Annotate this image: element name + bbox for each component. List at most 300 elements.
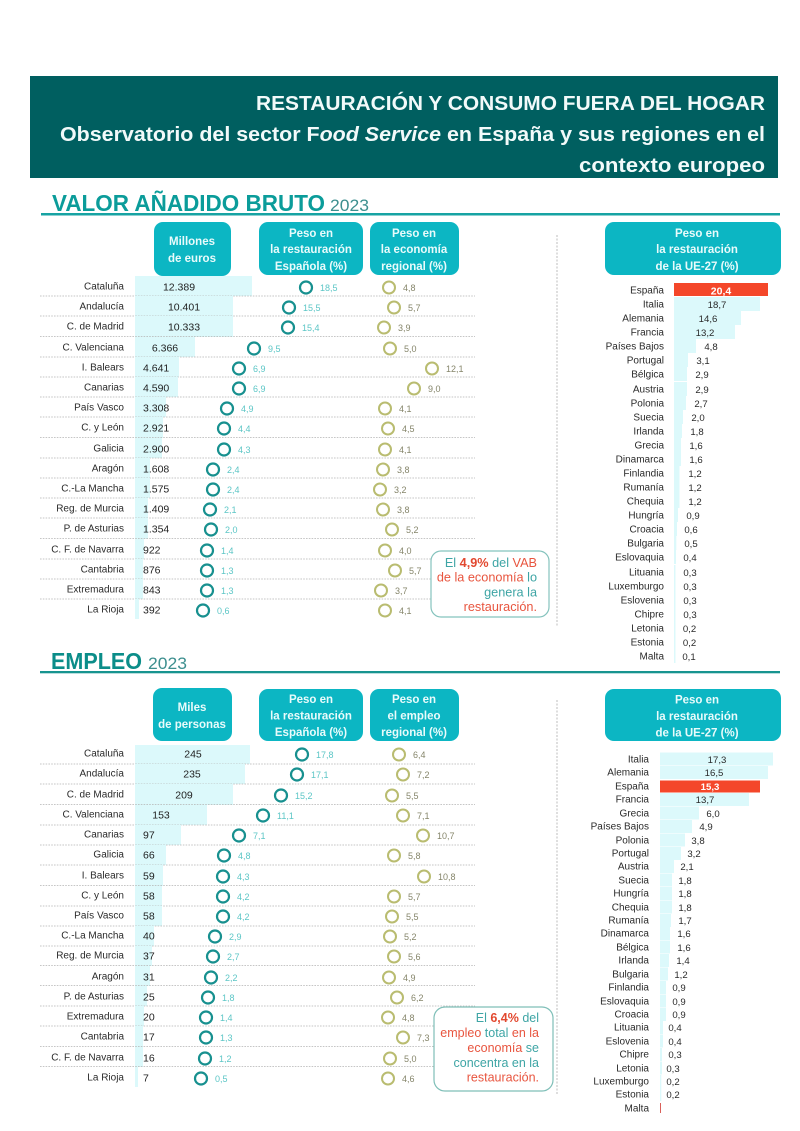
panel: VAB regiones — [40, 222, 475, 619]
bars: UE-27 VAB: 0,3 — [683, 582, 697, 593]
bars: UE-27 VAB: Croacia — [630, 524, 664, 536]
row: C.-La Mancha: 5,2 — [404, 932, 417, 942]
bars: UE-27 empleo: Eslovaquia — [600, 996, 649, 1008]
row: C. F. de Navarra — [40, 539, 475, 559]
row: C.-La Mancha: 2,4 — [227, 485, 240, 495]
header: peso en la restauración española: la restauración — [270, 710, 352, 722]
row: I. Balears: 12,1 — [446, 364, 464, 374]
bars: UE-27 empleo: Irlanda — [618, 956, 649, 966]
row: Galicia: 5,8 — [408, 851, 421, 861]
bars: UE-27 empleo: 15,3 — [701, 782, 719, 793]
row: I. Balears: 10,8 — [438, 872, 456, 882]
row: La Rioja: 392 — [143, 604, 161, 616]
bars: UE-27 VAB: Eslovenia — [621, 596, 664, 606]
row: C. Valenciana: C. Valenciana — [62, 342, 124, 354]
bars: UE-27 empleo: 1,8 — [678, 876, 692, 887]
row: C. y León: C. y León — [81, 422, 124, 434]
heading: empleo: EMPLEO — [51, 648, 142, 674]
row: C. F. de Navarra: 1,2 — [219, 1054, 232, 1064]
row: I. Balears: 4.641 — [143, 362, 169, 374]
row: P. de Asturias: 2,0 — [225, 525, 238, 535]
row: Galicia: 4,1 — [399, 445, 412, 455]
title banner: RESTAURACIÓN Y CONSUMO FUERA DEL HOGAR — [256, 91, 766, 115]
row: Canarias: 4.590 — [143, 382, 169, 394]
row: Andalucía: 15,5 — [303, 303, 321, 313]
bars: UE-27 VAB: Finlandia — [623, 468, 664, 480]
row: Reg. de Murcia — [40, 498, 475, 518]
header: peso en la restauración española: Peso en — [289, 228, 333, 240]
row: Extremadura: Extremadura — [67, 584, 124, 596]
row: C. F. de Navarra: 1,4 — [221, 546, 234, 556]
heading: empleo — [40, 648, 780, 674]
row: Cantabria: 5,7 — [409, 566, 422, 576]
row: C.-La Mancha: C.-La Mancha — [61, 484, 124, 494]
row: Reg. de Murcia: 37 — [143, 950, 155, 962]
row: C. y León — [40, 417, 475, 438]
callout: empleo 6,4%: restauración. — [467, 1070, 539, 1084]
callout: VAB 4,9%: de la economía lo — [437, 570, 537, 584]
bars: UE-27 empleo: 0,9 — [672, 997, 686, 1008]
bars: UE-27 empleo: 0,2 — [666, 1090, 680, 1101]
bars: UE-27 VAB: 0,4 — [683, 553, 697, 564]
row: Cantabria: 7,3 — [417, 1033, 430, 1043]
row: Cataluña — [40, 745, 475, 764]
bars: UE-27 empleo: Chequia — [612, 902, 649, 914]
bars: UE-27 VAB: 1,8 — [690, 427, 704, 438]
row: Galicia: 4,3 — [238, 445, 251, 455]
row: Galicia — [40, 845, 475, 865]
title banner: contexto europeo — [579, 155, 765, 177]
bars: UE-27 VAB: Luxemburgo — [608, 582, 664, 592]
row: País Vasco: 4,9 — [241, 404, 254, 414]
row: Aragón: Aragón — [92, 464, 124, 474]
header: peso en la restauración UE-27 — [605, 689, 781, 741]
row: Canarias: Canarias — [84, 382, 124, 394]
bars: UE-27 empleo: 1,2 — [674, 970, 688, 981]
row: I. Balears: I. Balears — [82, 870, 124, 882]
row: Andalucía: 235 — [183, 768, 201, 780]
bars: UE-27 empleo: Chipre — [620, 1050, 649, 1060]
bars: UE-27 VAB: Bélgica — [631, 370, 664, 380]
row: Andalucía: Andalucía — [80, 768, 124, 780]
header: peso en la restauración española: Española (%) — [275, 261, 347, 273]
row: Andalucía: Andalucía — [80, 302, 124, 312]
bars: UE-27 empleo: Finlandia — [608, 982, 649, 994]
row: C. F. de Navarra: 16 — [143, 1052, 155, 1064]
header: millones de euros: Millones — [169, 236, 215, 248]
row: C.-La Mancha: 2,9 — [229, 932, 242, 942]
callout: empleo 6,4%: concentra en la — [454, 1056, 539, 1070]
bars: UE-27 empleo: 0,9 — [672, 983, 686, 994]
row: C. Valenciana: 11,1 — [277, 811, 294, 821]
header: peso en la restauración UE-27: de la UE-27 (%) — [655, 261, 739, 273]
row: Galicia: Galicia — [93, 850, 124, 860]
bars: UE-27 VAB: 14,6 — [699, 314, 717, 325]
header: peso en la restauración UE-27 — [605, 222, 781, 275]
row: Andalucía: 5,7 — [408, 303, 421, 313]
row: Cataluña: Cataluña — [84, 748, 124, 760]
row: C. Valenciana: 5,0 — [404, 344, 417, 354]
row: Extremadura: 843 — [143, 584, 161, 596]
row: C. Valenciana — [40, 337, 475, 357]
row: La Rioja — [87, 599, 412, 619]
bars: UE-27 VAB: Lituania — [629, 568, 664, 578]
row: Cataluña: 18,5 — [320, 283, 338, 293]
header: peso en la restauración española — [259, 689, 363, 741]
row: C. y León: 4,4 — [238, 424, 251, 434]
bars: UE-27 VAB — [606, 283, 768, 663]
row: C. y León: C. y León — [81, 890, 124, 902]
bars: UE-27 empleo: Estonia — [616, 1090, 649, 1100]
row: Reg. de Murcia: 2,7 — [227, 952, 240, 962]
bars: UE-27 VAB: 1,6 — [689, 441, 703, 452]
row: Aragón: 31 — [143, 972, 155, 984]
bars: UE-27 VAB: Irlanda — [633, 426, 664, 438]
row: Aragón: 4,9 — [403, 973, 416, 983]
row: C. F. de Navarra: 4,0 — [399, 546, 412, 556]
row: C. Valenciana: 7,1 — [417, 811, 430, 821]
bars: UE-27 VAB: Países Bajos — [606, 342, 664, 352]
row: C. Valenciana: 6.366 — [152, 342, 178, 354]
bars: UE-27 VAB: 0,9 — [686, 511, 700, 522]
row: Cataluña: 245 — [184, 748, 202, 760]
row: I. Balears: 59 — [143, 870, 155, 882]
header: peso en la restauración UE-27: la restauración — [656, 244, 738, 256]
bars: UE-27 empleo: Italia — [628, 754, 649, 766]
row: Extremadura — [40, 579, 475, 599]
header: peso en la restauración UE-27: Peso en — [675, 694, 719, 706]
callout: VAB 4,9% — [431, 551, 549, 617]
row: P. de Asturias: P. de Asturias — [64, 524, 124, 534]
callout: empleo 6,4% — [434, 1007, 553, 1091]
bars: UE-27 empleo: 1,6 — [677, 929, 691, 940]
row: País Vasco — [40, 906, 475, 926]
row: Galicia: 4,8 — [238, 851, 251, 861]
bars: UE-27 empleo: Lituania — [614, 1022, 649, 1034]
bars: UE-27 empleo: Bélgica — [616, 942, 649, 954]
row: C. F. de Navarra: 5,0 — [404, 1054, 417, 1064]
divider: VAB vertical — [556, 235, 558, 626]
row: C.-La Mancha: 40 — [143, 930, 155, 942]
row: P. de Asturias — [40, 986, 475, 1006]
row: C. de Madrid: 5,5 — [406, 791, 419, 801]
row: Canarias: 97 — [143, 830, 155, 842]
row: Canarias: 9,0 — [428, 384, 441, 394]
row: Extremadura: Extremadura — [67, 1012, 124, 1022]
bars: UE-27 empleo: 0,2 — [666, 1077, 680, 1088]
bars: UE-27 VAB: 0,3 — [683, 610, 697, 621]
bars: UE-27 VAB: Malta — [640, 652, 664, 662]
bars: UE-27 VAB: 20,4 — [711, 286, 731, 298]
bars: UE-27 empleo: 16,5 — [705, 768, 723, 779]
row: País Vasco: 3.308 — [143, 402, 169, 414]
row: Andalucía: 7,2 — [417, 770, 430, 780]
row: Andalucía — [40, 764, 475, 784]
bars: UE-27 VAB: Polonia — [631, 398, 664, 410]
row: C. de Madrid: 10.333 — [168, 322, 200, 334]
row: Canarias: Canarias — [84, 830, 124, 840]
row: C. de Madrid: 15,2 — [295, 791, 313, 801]
bars: UE-27 VAB: 0,5 — [684, 539, 698, 550]
bars: UE-27 empleo: Polonia — [616, 836, 649, 846]
row: Galicia: 66 — [143, 850, 155, 862]
row: Cataluña: Cataluña — [84, 282, 124, 292]
panel: empleo regiones — [40, 688, 475, 1087]
row: P. de Asturias: 25 — [143, 992, 155, 1004]
bars: UE-27 VAB: 2,9 — [695, 385, 709, 396]
bars: UE-27 empleo: Luxemburgo — [593, 1076, 649, 1088]
bars: UE-27 VAB: Austria — [633, 384, 664, 396]
row: Cantabria: 876 — [143, 564, 161, 576]
divider: empleo vertical — [556, 700, 558, 1094]
bars: UE-27 VAB: Suecia — [633, 412, 664, 424]
row: Reg. de Murcia: 5,6 — [408, 952, 421, 962]
heading: valor añadido bruto — [41, 189, 780, 216]
bars: UE-27 empleo: Dinamarca — [601, 928, 649, 940]
row: País Vasco: 58 — [143, 910, 155, 922]
row: Aragón: 1.608 — [143, 464, 169, 476]
bars: UE-27 empleo: 17,3 — [708, 755, 726, 766]
panel: empleo UE-27 — [591, 689, 781, 1114]
bars: UE-27 empleo: Portugal — [612, 848, 649, 860]
row: Cantabria: 17 — [143, 1032, 155, 1044]
panel: VAB UE-27 — [605, 222, 781, 663]
bars: UE-27 VAB: Alemania — [622, 314, 664, 324]
row: Cataluña: 6,4 — [413, 750, 426, 760]
header: peso en la economía regional: Peso en — [392, 228, 436, 240]
bars: UE-27 empleo: 3,8 — [691, 836, 705, 847]
row: P. de Asturias: 6,2 — [411, 993, 424, 1003]
row: Canarias: 6,9 — [253, 384, 266, 394]
row: C.-La Mancha — [40, 926, 475, 946]
row: Andalucía: 10.401 — [168, 302, 200, 314]
callout: VAB 4,9%: genera la — [484, 586, 538, 600]
row: País Vasco: 5,5 — [406, 912, 419, 922]
row: I. Balears — [40, 357, 475, 377]
bars: UE-27 empleo: 4,9 — [699, 822, 713, 833]
bars: UE-27 empleo: 6,0 — [706, 809, 720, 820]
row: Aragón: Aragón — [92, 972, 124, 982]
row: Galicia: Galicia — [93, 444, 124, 454]
row: Cantabria: 1,3 — [220, 1033, 233, 1043]
header: peso en el empleo regional: Peso en — [392, 694, 436, 706]
row: Canarias — [40, 377, 475, 397]
bars: UE-27 empleo: 13,7 — [696, 795, 714, 806]
header: peso en la restauración española: Peso en — [289, 694, 333, 706]
row: C. Valenciana: 9,5 — [268, 344, 281, 354]
header: peso en la restauración UE-27: la restauración — [656, 711, 738, 723]
header: peso en la restauración española: la restauración — [270, 244, 352, 256]
row: Extremadura: 4,8 — [402, 1013, 415, 1023]
bars: UE-27 VAB: 3,1 — [696, 356, 710, 367]
bars: UE-27 empleo: 0,9 — [672, 1010, 686, 1021]
bars: UE-27 empleo: 2,1 — [680, 862, 694, 873]
row: Extremadura: 3,7 — [395, 586, 408, 596]
row: C. F. de Navarra: C. F. de Navarra — [51, 1052, 124, 1064]
row: C. de Madrid: 15,4 — [302, 323, 320, 333]
bars: UE-27 VAB: Dinamarca — [616, 454, 664, 466]
row: La Rioja — [87, 1067, 415, 1087]
row: Andalucía: 17,1 — [311, 770, 329, 780]
row: País Vasco: País Vasco — [74, 402, 124, 414]
row: C. de Madrid: C. de Madrid — [67, 322, 124, 332]
title banner — [30, 76, 778, 178]
bars: UE-27 empleo: Francia — [616, 794, 649, 806]
row: C. Valenciana — [40, 805, 475, 825]
row: Aragón: 2,4 — [227, 465, 240, 475]
bars: UE-27 empleo: 0,4 — [668, 1023, 682, 1034]
row: P. de Asturias — [40, 518, 475, 539]
row: Aragón — [40, 966, 475, 986]
bars: UE-27 VAB: Italia — [643, 300, 664, 310]
row: Galicia: 2.900 — [143, 444, 169, 456]
bars: UE-27 VAB: 1,2 — [688, 483, 702, 494]
bars: UE-27 VAB: 2,7 — [694, 399, 708, 410]
bars: UE-27 VAB: Hungría — [628, 510, 664, 522]
row: C. de Madrid: 3,9 — [398, 323, 411, 333]
bars: UE-27 empleo: 1,8 — [678, 889, 692, 900]
row: Andalucía — [40, 296, 475, 316]
row: La Rioja: La Rioja — [87, 604, 124, 616]
bars: UE-27 empleo: Grecia — [620, 808, 649, 820]
bars: UE-27 empleo: Hungría — [613, 888, 649, 900]
bars: UE-27 VAB: 0,1 — [682, 652, 696, 663]
row: C.-La Mancha: 3,2 — [394, 485, 407, 495]
row: Reg. de Murcia: Reg. de Murcia — [56, 504, 124, 514]
bars: UE-27 empleo: Croacia — [615, 1010, 649, 1020]
bars: UE-27 empleo: Malta — [625, 1104, 649, 1114]
row: Cantabria: Cantabria — [81, 1032, 124, 1042]
bars: UE-27 empleo: 1,6 — [677, 943, 691, 954]
row: Aragón: 3,8 — [397, 465, 410, 475]
bars: UE-27 VAB: Chequia — [627, 496, 664, 508]
callout: empleo 6,4%: empleo total en la — [440, 1026, 539, 1040]
callout: empleo 6,4%: El 6,4% del — [476, 1011, 539, 1025]
bars: UE-27 empleo: 3,2 — [687, 849, 701, 860]
bars: UE-27 empleo: 1,8 — [678, 903, 692, 914]
heading: valor añadido bruto: 2023 — [330, 197, 369, 215]
bars: UE-27 empleo: 0,3 — [666, 1064, 680, 1075]
bars: UE-27 VAB: 18,7 — [708, 300, 726, 311]
row: La Rioja: 0,5 — [215, 1074, 228, 1084]
row: Cantabria: Cantabria — [81, 564, 124, 576]
row: C. de Madrid — [40, 784, 475, 805]
bars: UE-27 VAB: 0,3 — [683, 596, 697, 607]
bars: UE-27 empleo: Eslovenia — [606, 1036, 649, 1048]
header: peso en el empleo regional — [370, 689, 459, 741]
header: peso en la restauración UE-27: Peso en — [675, 228, 719, 240]
title banner: Observatorio del sector F ood Service en España y sus regiones en el — [60, 124, 765, 146]
row: C. y León — [40, 886, 475, 906]
row: I. Balears: 4,3 — [237, 872, 250, 882]
row: Extremadura: 1,4 — [220, 1013, 233, 1023]
row: Reg. de Murcia: 3,8 — [397, 505, 410, 515]
row: C. y León: 4,5 — [402, 424, 415, 434]
bars: UE-27 VAB: Portugal — [627, 356, 664, 366]
header: peso en la restauración española — [259, 222, 363, 275]
bars: UE-27 VAB: España — [630, 286, 664, 296]
row: P. de Asturias: 1.354 — [143, 524, 169, 536]
bars: UE-27 VAB: Estonia — [631, 638, 664, 648]
bars: UE-27 VAB: 0,3 — [683, 568, 697, 579]
heading: empleo: 2023 — [148, 655, 187, 673]
row: C. y León: 58 — [143, 890, 155, 902]
header: peso en la economía regional: la economía — [381, 244, 448, 256]
header: miles de personas: de personas — [158, 719, 226, 731]
bars: UE-27 empleo: Alemania — [607, 768, 649, 778]
header: millones de euros — [154, 222, 231, 276]
bars: UE-27 VAB: Chipre — [635, 610, 664, 620]
header: miles de personas — [153, 688, 232, 741]
row: Cataluña: 17,8 — [316, 750, 334, 760]
bars: UE-27 VAB: 1,2 — [688, 497, 702, 508]
row: Galicia — [40, 438, 475, 458]
bars: UE-27 empleo: Bulgaria — [612, 970, 649, 980]
bars: UE-27 empleo: 1,4 — [676, 956, 690, 967]
bars: UE-27 empleo: Suecia — [618, 876, 649, 886]
row: C. de Madrid — [40, 316, 475, 337]
row: P. de Asturias: P. de Asturias — [64, 992, 124, 1002]
header: peso en la restauración UE-27: de la UE-27 (%) — [655, 728, 739, 740]
header: peso en la economía regional — [370, 222, 459, 275]
bars: UE-27 VAB: 0,2 — [683, 624, 696, 635]
bars: UE-27 empleo: Países Bajos — [591, 822, 649, 832]
row: C. y León: 4,2 — [237, 892, 250, 902]
bars: UE-27 VAB: Rumanía — [623, 482, 664, 494]
bars: UE-27 empleo: Letonia — [616, 1064, 649, 1074]
header: peso en la restauración española: Española (%) — [275, 727, 347, 739]
header: peso en el empleo regional: regional (%) — [381, 727, 447, 739]
row: C. de Madrid: 209 — [175, 790, 193, 802]
bars: UE-27 VAB: Bulgaria — [627, 538, 664, 550]
row: La Rioja: 0,6 — [217, 606, 230, 616]
row: I. Balears: I. Balears — [82, 362, 124, 374]
row: C.-La Mancha: C.-La Mancha — [61, 930, 124, 942]
row: Canarias: 10,7 — [437, 831, 455, 841]
row: Reg. de Murcia: Reg. de Murcia — [56, 950, 124, 962]
header: peso en la economía regional: regional (%) — [381, 261, 447, 273]
bars: UE-27 VAB: 0,6 — [684, 525, 698, 536]
heading: valor añadido bruto: VALOR AÑADIDO BRUTO — [52, 189, 325, 216]
row: País Vasco — [40, 397, 475, 417]
bars: UE-27 VAB: 13,2 — [696, 328, 714, 339]
bars: UE-27 VAB: 2,0 — [691, 413, 705, 424]
bars: UE-27 VAB: Francia — [631, 328, 664, 338]
row: Extremadura: 1,3 — [221, 586, 234, 596]
callout: empleo 6,4%: economía se — [467, 1041, 539, 1055]
bars: UE-27 empleo: 1,7 — [678, 916, 692, 927]
row: País Vasco: País Vasco — [74, 910, 124, 922]
row: C.-La Mancha: 1.575 — [143, 484, 169, 496]
header: miles de personas: Miles — [178, 702, 206, 714]
row: C. F. de Navarra: C. F. de Navarra — [51, 544, 124, 556]
header: peso en el empleo regional: el empleo — [387, 710, 441, 722]
row: P. de Asturias: 5,2 — [406, 525, 419, 535]
bars: UE-27 VAB: 1,2 — [688, 469, 702, 480]
row: Aragón: 2,2 — [225, 973, 238, 983]
row: Extremadura — [40, 1006, 475, 1026]
bars: UE-27 VAB: 0,2 — [683, 638, 696, 649]
row: Extremadura: 20 — [143, 1012, 155, 1024]
bars: UE-27 empleo: 0,3 — [668, 1050, 682, 1061]
row: C. Valenciana: C. Valenciana — [62, 810, 124, 820]
row: Cataluña — [40, 276, 475, 296]
row: La Rioja: 4,1 — [399, 606, 412, 616]
row: Canarias: 7,1 — [253, 831, 266, 841]
row: Reg. de Murcia: 1.409 — [143, 504, 169, 516]
bars: UE-27 empleo: 0,4 — [668, 1037, 682, 1048]
callout: VAB 4,9%: restauración. — [464, 600, 537, 614]
